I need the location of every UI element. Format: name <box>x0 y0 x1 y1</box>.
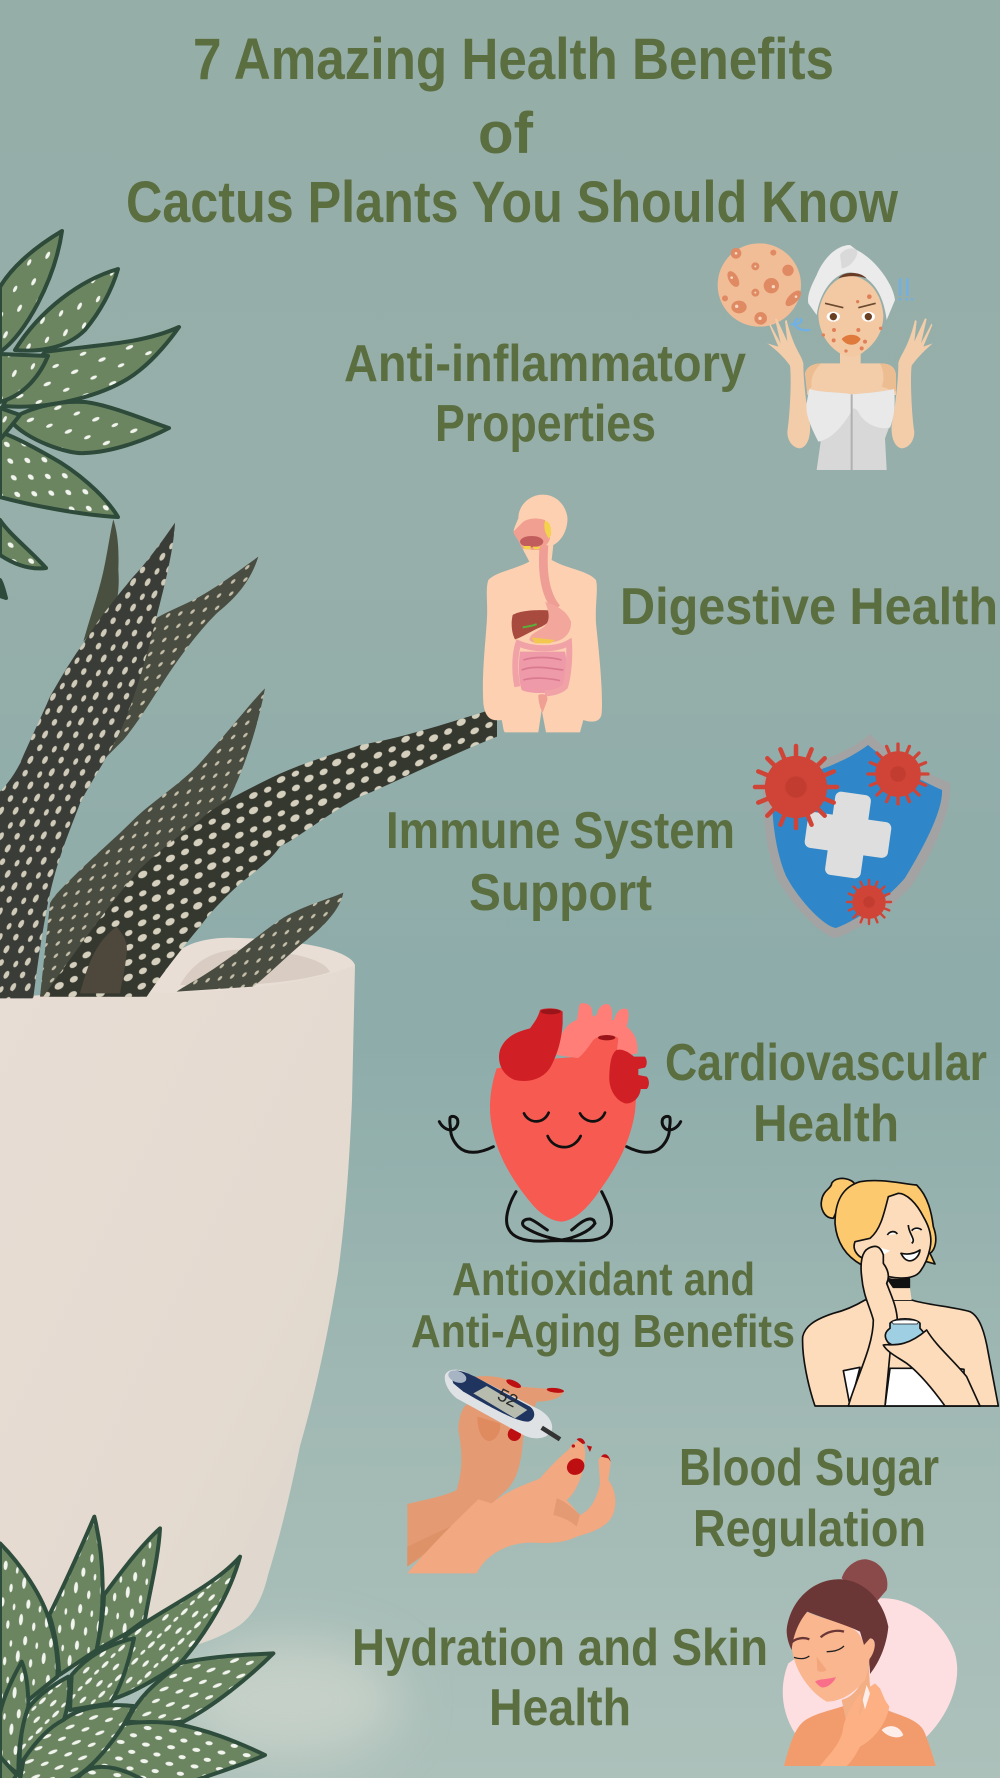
towel <box>843 1367 980 1406</box>
benefit label: Immune System Support: Immune System <box>386 802 735 860</box>
benefit label: Antioxidant and Anti-Aging Benefits: Antioxidant and <box>452 1253 755 1305</box>
face <box>818 276 883 357</box>
heart body <box>490 1052 636 1222</box>
face <box>854 1193 931 1278</box>
benefit label: Blood Sugar Regulation: Regulation <box>693 1500 926 1558</box>
benefit label: Blood Sugar Regulation <box>679 1439 939 1558</box>
right atrium <box>609 1050 649 1103</box>
illustration: meditating heart <box>439 1003 681 1241</box>
benefit label: Immune System Support <box>386 802 735 922</box>
torso <box>805 363 896 395</box>
right arm and hand <box>892 318 933 448</box>
stub leaf <box>80 927 127 993</box>
shoulders <box>784 1705 936 1766</box>
title: of <box>478 101 534 166</box>
hair <box>835 1181 936 1265</box>
benefit label: Immune System Support: Support <box>469 864 652 922</box>
legs <box>507 1192 612 1241</box>
back thin leaf <box>83 519 119 642</box>
pancreas <box>532 637 555 643</box>
viruses <box>755 744 928 924</box>
worry marks <box>792 279 912 330</box>
cream on cheek <box>875 1246 890 1254</box>
hand holding jar <box>883 1330 980 1406</box>
pink circle <box>783 1598 957 1737</box>
skin close-up circle <box>718 243 804 327</box>
neck <box>840 352 861 366</box>
left arm and hand <box>767 318 810 448</box>
body silhouette <box>483 495 602 732</box>
aortic stem <box>570 1035 618 1062</box>
liver <box>512 610 552 639</box>
tall left leaf <box>0 523 175 998</box>
hair <box>787 1579 888 1674</box>
face <box>792 1612 875 1702</box>
shield <box>763 734 950 938</box>
hand <box>820 1683 889 1766</box>
arm shadow <box>407 1523 457 1567</box>
rectum <box>538 694 547 713</box>
illustration: shield with viruses <box>755 734 950 938</box>
long right leaf <box>43 708 497 997</box>
right back leaf <box>100 557 258 763</box>
arms and hands <box>439 1116 681 1152</box>
front nails <box>564 1438 611 1478</box>
cross <box>801 788 895 882</box>
flower pot <box>0 938 355 1680</box>
aloe plant in pot <box>0 519 497 998</box>
esophagus <box>543 545 557 608</box>
hair bun <box>821 1178 855 1218</box>
lips <box>815 1677 836 1687</box>
large intestine <box>515 643 569 693</box>
mouth and throat <box>513 518 550 550</box>
benefit label: Hydration and Skin Health: Health <box>489 1679 631 1737</box>
benefit label: Cardiovascular Health <box>665 1034 987 1153</box>
hand on cheek <box>848 1246 897 1406</box>
towel on head <box>808 245 895 320</box>
benefit label: Anti-inflammatory Properties: Properties <box>435 395 656 453</box>
illustration: digestive system body <box>483 495 602 732</box>
neck <box>888 1277 912 1300</box>
stomach <box>529 602 571 643</box>
decorative plant top left <box>0 231 179 598</box>
glucose meter <box>445 1368 560 1439</box>
benefit label: Hydration and Skin Health: Hydration and Skin <box>352 1619 768 1677</box>
brows and eyes <box>791 1631 844 1643</box>
towel dress <box>807 389 895 470</box>
nose <box>817 1657 827 1672</box>
meter nails <box>505 1378 564 1441</box>
title <box>126 27 899 235</box>
benefit label: Anti-inflammatory Properties: Anti-inflammatory <box>344 335 746 393</box>
cream <box>863 1685 903 1737</box>
title: 7 Amazing Health Benefits <box>193 27 834 92</box>
benefit label: Antioxidant and Anti-Aging Benefits <box>411 1253 795 1357</box>
hair bun <box>842 1559 887 1602</box>
illustration: woman with acne <box>718 243 933 470</box>
illustration: hand with glucose meter <box>407 1368 615 1573</box>
illustration: woman with skincare <box>783 1559 957 1766</box>
face <box>524 1113 605 1147</box>
table surface glow <box>180 1640 400 1760</box>
benefit label: Anti-inflammatory Properties <box>344 335 746 453</box>
small intestine <box>519 652 567 693</box>
small right leaf <box>177 893 343 992</box>
face details <box>887 1225 922 1261</box>
front hand <box>407 1441 615 1573</box>
decorative plant bottom left <box>0 1517 273 1778</box>
benefit label: Cardiovascular Health: Health <box>753 1095 899 1153</box>
benefit label: Hydration and Skin Health <box>352 1619 768 1737</box>
benefit label: Antioxidant and Anti-Aging Benefits: Anti-Aging Benefits <box>411 1305 795 1357</box>
glucose meter: 52 <box>494 1385 521 1411</box>
cream jar <box>885 1319 925 1348</box>
front middle leaf <box>43 835 277 997</box>
eyes brows and lips <box>822 294 882 353</box>
benefit label: Blood Sugar Regulation: Blood Sugar <box>679 1439 939 1497</box>
back hand <box>407 1376 563 1567</box>
middle back leaf <box>40 688 265 997</box>
neck <box>842 1660 873 1723</box>
title: Cactus Plants You Should Know <box>126 170 899 235</box>
aorta and atrium <box>499 1008 563 1081</box>
illustration: woman applying cream <box>803 1178 998 1406</box>
pulmonary artery <box>557 1003 638 1058</box>
body <box>803 1300 998 1406</box>
